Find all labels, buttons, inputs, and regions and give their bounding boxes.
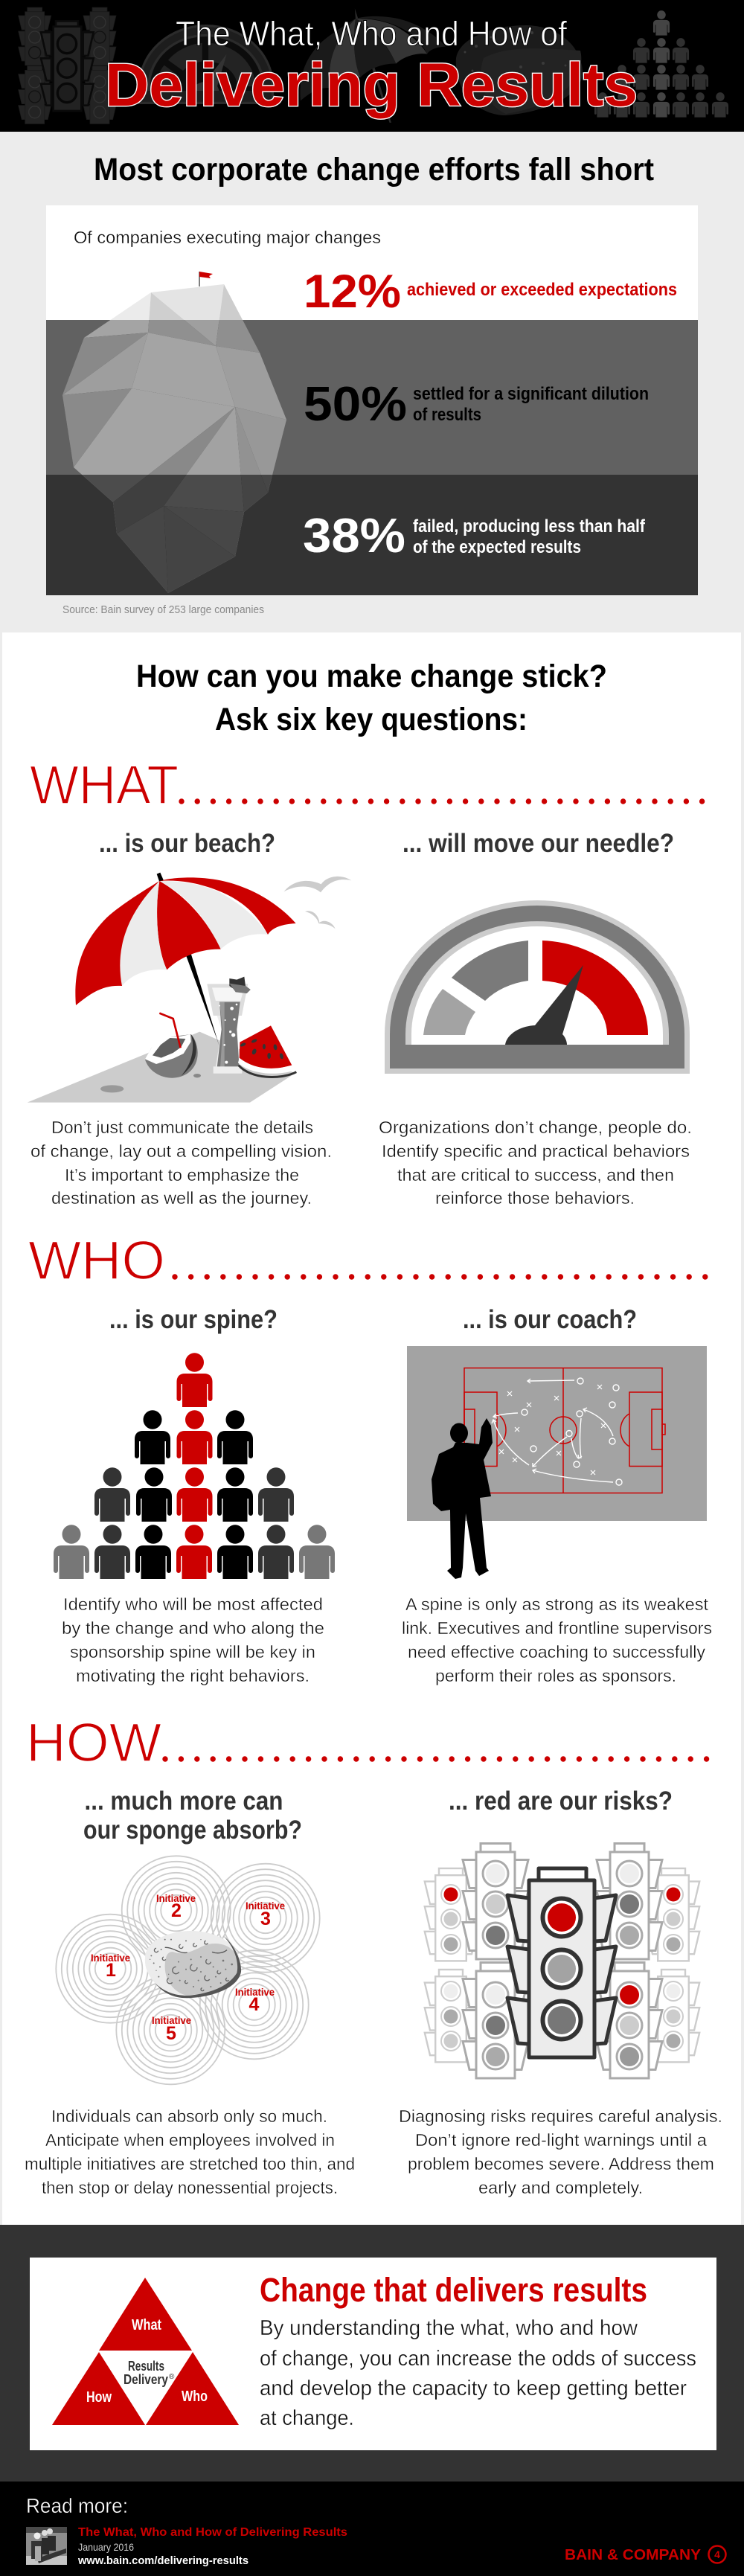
icon: coach at tactics board: [407, 1346, 707, 1579]
icon: dark sponge: [456, 25, 583, 115]
text: beach: of change, lay out a compelling vision.: [31, 1141, 332, 1161]
source note: Source: Bain survey of 253 large companies: [62, 603, 264, 616]
initiative labels: Initiative: [235, 1986, 275, 1998]
question: sponge: [83, 1787, 302, 1845]
photo: workers on a structure: [26, 2527, 67, 2565]
question: needle: ... will move our needle?: [403, 829, 674, 858]
panel: white questions section: [2, 632, 741, 2225]
text: beach: It’s important to emphasize the: [65, 1165, 299, 1185]
white conclusion card: [30, 2258, 716, 2450]
Bain and Company logo: BAIN & COMPANY: [565, 2547, 702, 2563]
stat: 50 percent: [304, 377, 649, 431]
icon: people pyramid: [54, 1353, 335, 1579]
initiative labels: Initiative: [152, 2014, 191, 2026]
text: sponge: Anticipate when employees involved in: [45, 2130, 335, 2150]
text: needle: reinforce those behaviors.: [435, 1188, 635, 1208]
question: coach: ... is our coach?: [463, 1305, 637, 1334]
text: spine: Identify who will be most affected: [63, 1595, 323, 1614]
text: coach: link. Executives and frontline supervisors: [402, 1618, 712, 1638]
initiative labels: [91, 1892, 285, 2044]
section heading: WHAT: WHAT: [30, 755, 179, 816]
text: risks: problem becomes severe. Address them: [408, 2154, 714, 2173]
primary traffic light: [507, 1868, 616, 2057]
tactics board: [407, 1346, 707, 1521]
panel: iceberg statistics: [46, 205, 698, 595]
icon: sponge with initiative circles: [56, 1856, 320, 2084]
icon: dark people pyramid: [594, 10, 728, 118]
text: sponge: multiple initiatives are stretched too thin, and: [25, 2154, 355, 2173]
panel: conclusion band: [0, 2225, 744, 2482]
seagulls: [284, 877, 351, 929]
title line 1: The What, Who and How of: [176, 14, 567, 53]
heading: most corporate change: Most corporate change efforts fall short: [94, 152, 654, 188]
text: beach: Don’t just communicate the details: [51, 1118, 313, 1137]
text: needle: [379, 1118, 692, 1208]
text: coach: perform their roles as sponsors.: [435, 1666, 676, 1685]
initiative labels: Initiative: [91, 1952, 130, 1964]
article date: January 2016: [78, 2541, 134, 2553]
diagram: results delivery triangle: What: [132, 2317, 161, 2333]
text: sponge: then stop or delay nonessential projects.: [42, 2178, 338, 2197]
initiative labels: 1: [106, 1960, 116, 1981]
initiative labels: 3: [260, 1909, 271, 1929]
icon: iceberg: [62, 272, 286, 593]
question: beach: ... is our beach?: [99, 829, 275, 858]
icon: dark traffic lights: [19, 7, 116, 124]
pebbles: [100, 1074, 201, 1092]
text: needle: Organizations don’t change, people do.: [379, 1118, 692, 1137]
text: conclusion: of change, you can increase the odds of success: [260, 2347, 696, 2371]
diagram: results delivery triangle: [52, 2278, 239, 2425]
secondary traffic lights: [463, 1844, 662, 2078]
text: conclusion: [260, 2316, 696, 2430]
footer: [0, 2482, 744, 2576]
header banner: [0, 0, 744, 132]
watermelon: [238, 1025, 296, 1077]
diagram: results delivery triangle: Delivery: [124, 2372, 168, 2387]
section heading: HOW: HOW: [26, 1713, 161, 1773]
umbrella canopy: [75, 877, 296, 1005]
stat: 12 percent: 12%: [304, 266, 401, 318]
article title: The What, Who and How of Delivering Results: [78, 2526, 347, 2539]
soccer field lines: [464, 1368, 665, 1493]
question: sponge: our sponge absorb?: [83, 1816, 302, 1845]
text: spine: [62, 1595, 324, 1685]
stat: 12 percent: [304, 266, 677, 318]
stat: 50 percent: settled for a significant dilution: [413, 384, 649, 404]
question: sponge: ... much more can: [85, 1787, 283, 1816]
article url: www.bain.com/delivering-results: [77, 2554, 248, 2567]
section heading: WHO: WHO: [28, 1231, 165, 1291]
text: conclusion: at change.: [260, 2406, 354, 2430]
icon: traffic lights: [425, 1844, 699, 2078]
initiative labels: 5: [166, 2023, 176, 2044]
diagram: results delivery triangle: ®: [169, 2373, 175, 2381]
icon: beach umbrella scene: [28, 873, 351, 1103]
text: of companies: Of companies executing major changes: [74, 228, 381, 247]
sand: [28, 1032, 295, 1103]
text: coach: need effective coaching to successfully: [408, 1642, 705, 1662]
umbrella pole: [157, 873, 219, 1047]
text: spine: by the change and who along the: [62, 1618, 324, 1638]
diagram: results delivery triangle: Results: [128, 2359, 164, 2374]
heading: change that delivers results: Change that delivers results: [260, 2271, 647, 2309]
initiative labels: Initiative: [246, 1900, 285, 1912]
text: beach: [31, 1118, 332, 1208]
text: conclusion: and develop the capacity to keep getting better: [260, 2377, 687, 2400]
text: sponge: [25, 2106, 355, 2197]
text: needle: that are critical to success, and then: [397, 1165, 674, 1185]
players crosses: [499, 1385, 606, 1475]
tertiary traffic lights: [425, 1868, 699, 2062]
icon: gauge with needle: [385, 900, 690, 1074]
stat: 38 percent: 38%: [303, 508, 405, 563]
initiative labels: 4: [249, 1994, 260, 2015]
title line 2: Delivering Results: [105, 51, 638, 119]
diagram: results delivery triangle: Who: [182, 2388, 208, 2405]
heading: how can you make change stick: How can you make change stick?: [136, 659, 607, 694]
play arrows: [492, 1379, 613, 1482]
text: risks: [399, 2106, 722, 2197]
text: sponge: Individuals can absorb only so much.: [51, 2106, 327, 2126]
heading: how can you make change stick: [136, 659, 607, 737]
coconut: [145, 1013, 198, 1078]
text: spine: sponsorship spine will be key in: [70, 1642, 315, 1662]
sponge: [145, 1931, 241, 1998]
text: needle: Identify specific and practical behaviors: [382, 1141, 690, 1161]
stat: 50 percent: 50%: [304, 377, 407, 431]
drink glass: [207, 977, 251, 1074]
read more label: Read more:: [26, 2494, 128, 2517]
concentric initiative rings: [56, 1856, 320, 2084]
man silhouette: [432, 1418, 493, 1579]
initiative labels: 2: [171, 1900, 182, 1921]
Bain and Company logo: 4: [714, 2548, 720, 2560]
stat: 12 percent: achieved or exceeded expectations: [407, 280, 677, 300]
stat: 38 percent: of the expected results: [413, 537, 581, 557]
initiative labels: Initiative: [156, 1892, 196, 1904]
question: spine: ... is our spine?: [109, 1305, 278, 1334]
text: coach: [402, 1595, 712, 1685]
icon: dark umbrella: [300, 8, 446, 123]
diagram: results delivery triangle: How: [86, 2389, 112, 2406]
text: beach: destination as well as the journey.: [51, 1188, 312, 1208]
stat: 38 percent: [303, 508, 646, 563]
heading: how can you make change stick: Ask six key questions:: [215, 702, 527, 737]
players circles: [522, 1378, 622, 1485]
text: risks: Diagnosing risks requires careful analysis.: [399, 2106, 722, 2126]
text: conclusion: By understanding the what, who and how: [260, 2316, 638, 2340]
stat: 38 percent: failed, producing less than half: [413, 516, 646, 536]
icon: dark gauge: [138, 25, 274, 104]
text: risks: early and completely.: [478, 2178, 643, 2197]
text: spine: motivating the right behaviors.: [76, 1666, 310, 1685]
stat: 50 percent: of results: [413, 405, 481, 425]
text: risks: Don’t ignore red-light warnings until a: [415, 2130, 707, 2150]
text: coach: A spine is only as strong as its weakest: [405, 1595, 709, 1614]
question: risks: ... red are our risks?: [449, 1787, 673, 1816]
